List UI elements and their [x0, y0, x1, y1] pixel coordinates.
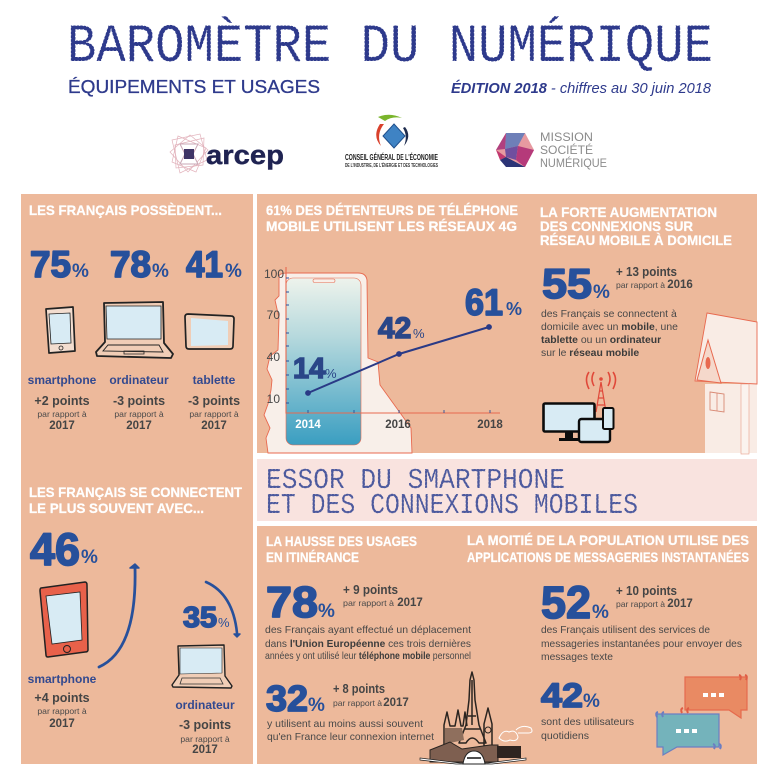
stat: tablette ownership: 2017	[201, 420, 227, 432]
logo: conseil général de l'économie: CONSEIL GÉNÉRAL DE L'ÉCONOMIE	[345, 153, 438, 162]
stat: smartphone connection: 46	[30, 524, 80, 575]
logo: arcep	[170, 134, 284, 173]
stat: 32%: %	[308, 695, 325, 716]
text: 78% description	[265, 625, 471, 662]
stat: tablette ownership	[185, 244, 242, 432]
stat: 55%: + 13 points	[616, 265, 677, 279]
heading: 61% 4G: 61% DES DÉTENTEURS DE TÉLÉPHONE	[266, 202, 518, 218]
stat: 32%: par rapport à	[333, 698, 382, 708]
heading: forte augmentation	[540, 204, 732, 248]
stat: 78%	[266, 578, 423, 627]
banner: essor du smartphone: ET DES CONNEXIONS MOBILES	[266, 489, 638, 522]
text: 78% description: dans l'Union Européenne ces trois dernières	[265, 639, 471, 650]
text: 52% description	[541, 625, 742, 663]
line chart: 4G usage: 42	[378, 312, 411, 345]
stat: 78%: 2017	[397, 597, 423, 609]
heading: forte augmentation: RÉSEAU MOBILE À DOMICILE	[540, 232, 732, 248]
heading: itinérance	[266, 533, 417, 565]
stat: ordinateur ownership	[96, 244, 173, 432]
stat: smartphone ownership: 2017	[49, 420, 75, 432]
stat: ordinateur ownership: 78	[110, 244, 151, 285]
icon: orange speech bubble	[681, 675, 747, 718]
heading: forte augmentation: LA FORTE AUGMENTATION	[540, 204, 717, 220]
title: BAROMÈTRE DU NUMÉRIQUE	[67, 16, 713, 78]
icon: tablet	[185, 314, 234, 349]
heading: les français se connectent: LE PLUS SOUVENT AVEC...	[29, 500, 204, 516]
stat: 55%: %	[593, 282, 610, 303]
stat: smartphone ownership: %	[72, 261, 89, 282]
heading: 61% 4G	[266, 202, 518, 234]
line chart: 4G usage: 10	[267, 392, 280, 406]
logo: conseil général de l'économie	[345, 115, 438, 169]
stat: 55%	[542, 260, 693, 307]
stat: 32%: 2017	[383, 697, 409, 709]
heading: forte augmentation: DES CONNEXIONS SUR	[540, 218, 693, 234]
stat: 52%: %	[592, 602, 609, 623]
stat: 52%: 2017	[667, 598, 693, 610]
stat: smartphone ownership: 75	[30, 244, 71, 285]
icon: small laptop	[172, 645, 232, 688]
stat: smartphone ownership: smartphone	[28, 373, 97, 387]
stat: ordinateur connection: ordinateur	[175, 698, 235, 712]
icon: blue speech bubble	[656, 712, 721, 755]
line chart: 4G usage: 70	[267, 308, 280, 322]
text: 78% description: années y ont utilisé leur téléphone mobile personnel	[265, 651, 471, 662]
stat: 78%: 78	[266, 578, 318, 627]
heading: les français se connectent: LES FRANÇAIS SE CONNECTENT	[29, 484, 242, 500]
text: 55% description: des Français se connectent à	[541, 309, 677, 320]
stat: smartphone connection: 2017	[49, 718, 75, 730]
line chart: 4G usage: 2016	[385, 419, 411, 431]
icon: smartphone	[46, 307, 75, 353]
line chart: 4G usage: 2014	[295, 419, 321, 431]
stat: tablette ownership: par rapport à	[189, 409, 239, 419]
line chart: 4G usage: 14	[293, 353, 325, 385]
stat: tablette ownership: -3 points	[188, 394, 240, 408]
stat: smartphone connection: +4 points	[34, 691, 90, 705]
text: 55% description: sur le réseau mobile	[541, 348, 639, 359]
banner: essor du smartphone	[257, 459, 757, 522]
text: 32% description: y utilisent au moins aussi souvent	[267, 719, 423, 730]
header	[67, 16, 713, 97]
icon: laptop	[96, 302, 173, 358]
line chart: 4G usage: 40	[267, 350, 280, 364]
line chart: 4G usage: %	[506, 299, 522, 319]
stat: 42%: quotidiens	[541, 731, 589, 742]
stat: 42%: sont des utilisateurs	[541, 717, 634, 728]
line chart: 4G usage: %	[325, 366, 337, 381]
text: 52% description: messages texte	[541, 652, 613, 663]
stat: smartphone ownership	[28, 244, 97, 432]
stat: ordinateur connection: -3 points	[179, 718, 231, 732]
heading: 61% 4G: MOBILE UTILISENT LES RÉSEAUX 4G	[266, 218, 517, 234]
heading: itinérance: LA HAUSSE DES USAGES	[266, 533, 417, 549]
icon: red smartphone	[40, 582, 88, 657]
arrow: down	[206, 582, 240, 637]
stat: smartphone ownership: par rapport à	[37, 409, 87, 419]
stat: tablette ownership: 41	[186, 244, 223, 285]
stat: ordinateur connection: par rapport à	[180, 734, 230, 744]
edition: ÉDITION 2018 - chiffres au 30 juin 2018	[451, 80, 712, 97]
panel: left column	[21, 194, 253, 764]
heading: itinérance: EN ITINÉRANCE	[266, 549, 359, 565]
stat: 42%	[541, 677, 634, 742]
line chart: 4G usage: %	[413, 326, 425, 341]
stat: ordinateur ownership: par rapport à	[114, 409, 164, 419]
stat: ordinateur ownership: 2017	[126, 420, 152, 432]
stat: 78%: + 9 points	[343, 583, 398, 597]
stat: 52%: + 10 points	[616, 584, 677, 598]
heading: les français se connectent	[29, 484, 242, 516]
stat: 55%: 2016	[667, 279, 693, 291]
icon: antenna and devices	[544, 372, 616, 442]
line chart: 4G usage: 2018	[477, 419, 503, 431]
stat: 52%: 52	[541, 577, 591, 628]
text: 78% description: des Français ayant effectué un déplacement	[265, 625, 471, 636]
logo: mission société numérique	[496, 132, 607, 170]
icon: house	[695, 313, 757, 454]
logo: mission société numérique: MISSION	[540, 132, 593, 144]
heading: messageries instantanées	[467, 532, 749, 565]
stat: smartphone connection: %	[81, 547, 98, 568]
stat: 32%	[266, 678, 409, 719]
stat: ordinateur connection	[172, 582, 240, 756]
stat: 55%: par rapport à	[616, 280, 665, 290]
heading: les français possèdent: LES FRANÇAIS POSSÈDENT...	[29, 202, 222, 218]
stat: ordinateur ownership: %	[152, 261, 169, 282]
stat: ordinateur connection: 2017	[192, 744, 218, 756]
panel: connexions mobiles	[257, 194, 757, 454]
stat: 52%	[541, 577, 693, 628]
text: 55% description: domicile avec un mobile, une	[541, 322, 678, 333]
stat: 55%: 55	[542, 260, 592, 307]
arrow: up	[99, 564, 139, 667]
illustration: european landmarks and plane	[420, 672, 532, 764]
stat: 42%: %	[583, 691, 600, 712]
text: 32% description	[267, 719, 434, 743]
stat: tablette ownership: tablette	[193, 373, 236, 387]
logo: arcep: arcep	[206, 140, 284, 170]
stat: 52%: par rapport à	[616, 599, 665, 609]
illustration: hand holding phone	[264, 273, 412, 453]
stat: smartphone connection: smartphone	[28, 672, 97, 686]
subtitle: ÉQUIPEMENTS ET USAGES	[68, 76, 320, 97]
stat: tablette ownership: %	[225, 261, 242, 282]
stat: 32%: 32	[266, 678, 308, 719]
stat: 78%: par rapport à	[343, 598, 394, 608]
stat: ordinateur ownership: -3 points	[113, 394, 165, 408]
logo: conseil général de l'économie: DE L'INDUSTRIE, DE L'ÉNERGIE ET DES TECHNOLOGIES	[345, 161, 438, 169]
stat: smartphone ownership: +2 points	[34, 394, 90, 408]
stat: ordinateur connection: 35	[183, 602, 217, 634]
line chart: 4G usage: 61	[465, 282, 503, 323]
logo: mission société numérique: NUMÉRIQUE	[540, 157, 607, 170]
text: 55% description: tablette ou un ordinateur	[541, 335, 661, 346]
line chart: 4G usage	[264, 267, 522, 431]
line chart: 4G usage: 100	[264, 267, 284, 281]
heading: messageries instantanées: LA MOITIÉ DE LA POPULATION UTILISE DES	[467, 532, 749, 548]
stat: 32%: + 8 points	[333, 682, 385, 696]
logo: mission société numérique: SOCIÉTÉ	[540, 144, 593, 157]
panel: usages	[257, 526, 757, 764]
stat: 78%: %	[318, 601, 335, 622]
stat: ordinateur ownership: ordinateur	[109, 373, 169, 387]
stat: 42%: 42	[541, 677, 583, 715]
stat: smartphone connection: par rapport à	[37, 706, 87, 716]
text: 32% description: qu'en France leur connexion internet	[267, 732, 434, 743]
stat: ordinateur connection: %	[218, 615, 230, 630]
banner: essor du smartphone: ESSOR DU SMARTPHONE	[266, 464, 565, 497]
text: 52% description: des Français utilisent des services de	[541, 625, 710, 636]
stat: smartphone connection	[28, 524, 139, 730]
text: 52% description: messageries instantanées pour envoyer des	[541, 639, 742, 650]
